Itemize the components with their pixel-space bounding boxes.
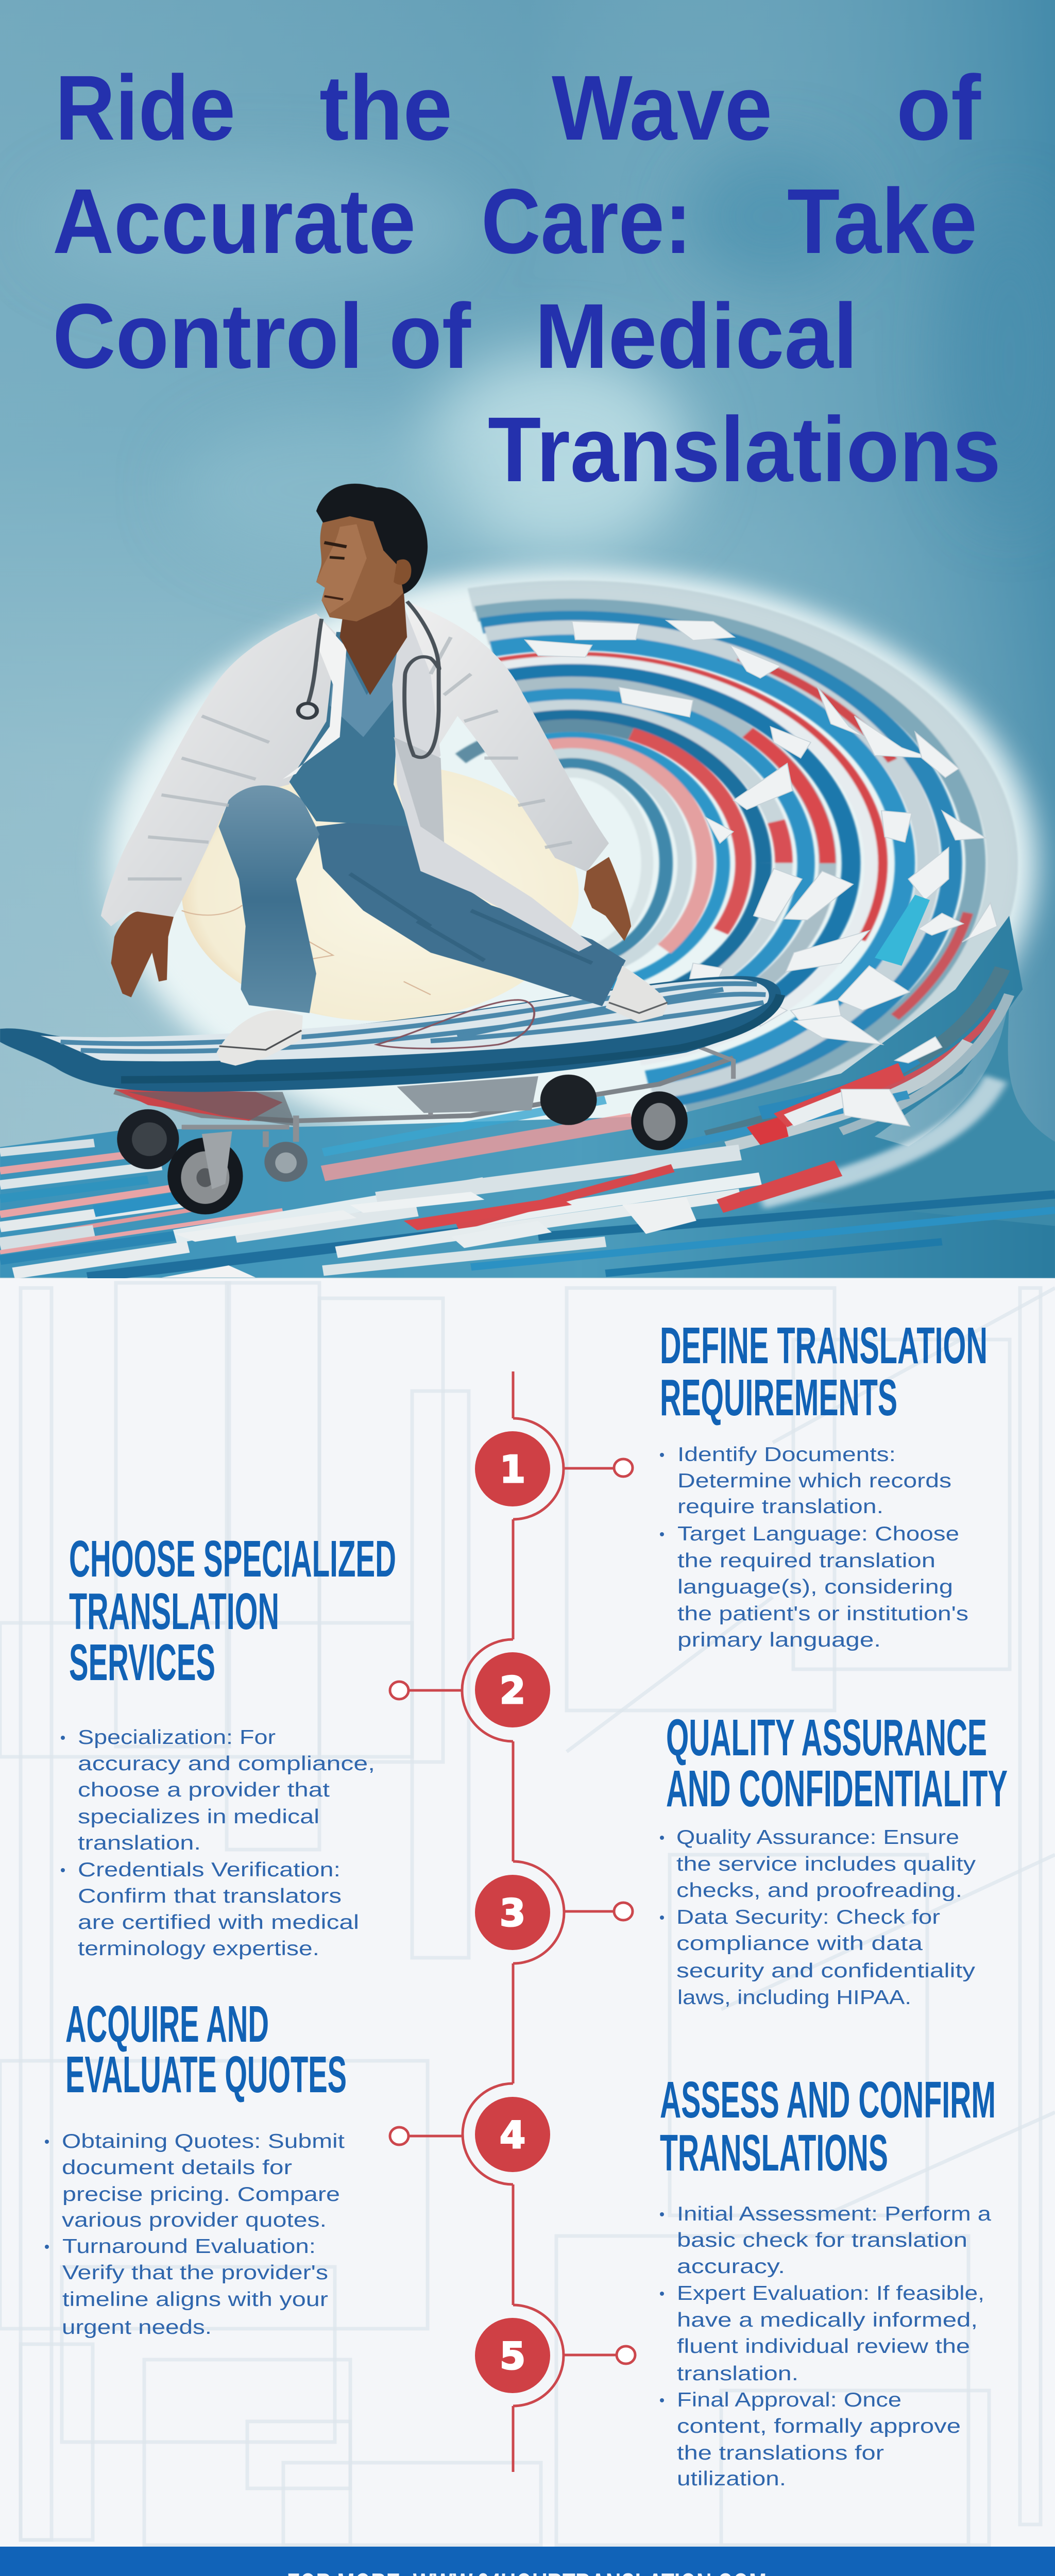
bullet list: various provider quotes.	[62, 2209, 327, 2231]
title: Care:	[481, 170, 692, 273]
step 2 marker: 2	[500, 1669, 525, 1712]
bullet list: Credentials Verification:	[78, 1859, 341, 1881]
footer bar	[0, 2547, 1055, 2576]
bullet list: primary language.	[677, 1629, 881, 1651]
bullet list: utilization.	[677, 2468, 786, 2490]
bullet list: urgent needs.	[62, 2316, 212, 2338]
panel: define translation requirements	[660, 1317, 988, 1651]
heading	[660, 1317, 988, 1427]
hands	[111, 911, 174, 997]
document floor strips	[0, 916, 1055, 1278]
title: of	[389, 284, 471, 387]
shoes	[217, 1010, 303, 1065]
bullet list: accuracy.	[677, 2256, 785, 2278]
illustration traced in local coordinates	[0, 484, 1055, 1278]
bullet list: precise pricing. Compare	[62, 2183, 340, 2206]
bullet list: Confirm that translators	[78, 1885, 342, 1907]
board	[0, 976, 781, 1092]
bullet list: choose a provider that	[78, 1779, 330, 1801]
heading: EVALUATE QUOTES	[65, 2046, 347, 2104]
heading	[65, 1995, 347, 2104]
bullet list: Specialization: For	[78, 1726, 276, 1749]
bullet list: the patient's or institution's	[677, 1603, 968, 1625]
bullet list: Initial Assessment: Perform a	[677, 2203, 991, 2225]
bullet list	[660, 1444, 968, 1651]
bullet list: the required translation	[677, 1550, 935, 1572]
step 4 marker	[390, 2083, 550, 2184]
bullet list: checks, and proofreading.	[676, 1879, 962, 1902]
bullet list: require translation.	[677, 1496, 883, 1518]
panel: quality assurance and confidentiality	[660, 1709, 1008, 2009]
timeline	[390, 1371, 635, 2472]
scrub top	[290, 632, 411, 826]
panel: acquire and evaluate quotes	[45, 1995, 347, 2338]
bullet list: laws, including HIPAA.	[677, 1987, 911, 2009]
bullet list: language(s), considering	[677, 1576, 953, 1598]
bullet list: content, formally approve	[677, 2415, 961, 2437]
heading: TRANSLATIONS	[660, 2124, 888, 2182]
bullet list	[45, 2130, 345, 2338]
title	[53, 56, 1001, 501]
coat back	[101, 614, 340, 926]
bullet list: compliance with data	[676, 1933, 923, 1955]
bullet list: timeline aligns with your	[62, 2289, 328, 2311]
neck and head	[340, 590, 407, 695]
step 3 marker: 3	[500, 1891, 525, 1935]
title: Wave	[552, 56, 772, 159]
stretcher frame and wheels	[114, 1045, 734, 1214]
hero illustration panel	[0, 0, 1055, 1278]
heading: SERVICES	[69, 1634, 215, 1691]
bullet list: Determine which records	[677, 1470, 951, 1492]
bullet list: security and confidentiality	[676, 1960, 976, 1982]
globe behind doctor	[182, 764, 578, 1021]
coat front	[392, 606, 592, 952]
panel: choose specialized translation services	[61, 1530, 396, 1960]
title: Ride	[55, 56, 235, 159]
hair	[316, 484, 428, 594]
bullet list	[660, 1826, 976, 2009]
doctor	[0, 484, 781, 1214]
bullet list: the translations for	[677, 2442, 884, 2464]
bullet list	[61, 1726, 375, 1960]
bullet list	[660, 2203, 991, 2490]
step 5 marker	[475, 2305, 635, 2406]
bullet list: translation.	[677, 2363, 798, 2385]
bullet list: Quality Assurance: Ensure	[676, 1826, 959, 1849]
wave of medical documents	[454, 580, 1018, 1112]
bullet list: Obtaining Quotes: Submit	[62, 2130, 345, 2153]
title: Medical	[535, 284, 858, 387]
step 5 marker: 5	[500, 2334, 525, 2378]
title: of	[896, 56, 981, 159]
heading	[660, 2071, 996, 2182]
heading: TRANSLATION	[69, 1583, 279, 1640]
faint blueprint background pattern	[0, 1283, 1055, 2545]
bullet list: Turnaround Evaluation:	[62, 2235, 316, 2258]
bullet list: fluent individual review the	[677, 2335, 970, 2358]
step 1 marker: 1	[500, 1448, 525, 1491]
bullet list: basic check for translation	[677, 2229, 967, 2251]
heading	[69, 1530, 396, 1691]
step 3 marker	[475, 1861, 633, 1963]
bullet list: document details for	[62, 2157, 292, 2179]
bullet list: translation.	[78, 1832, 201, 1854]
panel: assess and confirm translations	[660, 2071, 996, 2490]
bullet list: accuracy and compliance,	[78, 1753, 375, 1775]
loose paper sheets	[525, 620, 997, 1126]
bullet list: the service includes quality	[676, 1853, 976, 1875]
page background: lower section	[0, 1278, 1055, 2576]
title: Control	[53, 284, 363, 387]
timeline spine	[512, 1371, 514, 2472]
bullet list: terminology expertise.	[78, 1938, 319, 1960]
bullet list: Verify that the provider's	[62, 2262, 328, 2284]
bullet list: Target Language: Choose	[677, 1523, 959, 1545]
title: Accurate	[53, 170, 416, 273]
stethoscope	[306, 601, 439, 757]
bullet list: Final Approval: Once	[677, 2389, 901, 2411]
heading	[666, 1709, 1008, 1818]
step 4 marker: 4	[500, 2113, 525, 2157]
title: Take	[787, 170, 977, 273]
bullet list: are certified with medical	[78, 1911, 359, 1934]
bullet list: Identify Documents:	[677, 1444, 896, 1466]
bullet list: have a medically informed,	[677, 2309, 978, 2331]
step 2 marker	[390, 1639, 550, 1741]
bullet list: Data Security: Check for	[676, 1906, 940, 1928]
step 1 marker	[475, 1418, 633, 1519]
bullet list: Expert Evaluation: If feasible,	[677, 2282, 984, 2304]
trousers	[316, 816, 626, 1006]
heading: ACQUIRE AND	[65, 1995, 269, 2053]
title: the	[319, 56, 452, 159]
wave halo	[108, 569, 1036, 1158]
bullet list: specializes in medical	[78, 1806, 319, 1828]
title: Translations	[488, 398, 1001, 501]
heading: CHOOSE SPECIALIZED	[69, 1530, 396, 1588]
